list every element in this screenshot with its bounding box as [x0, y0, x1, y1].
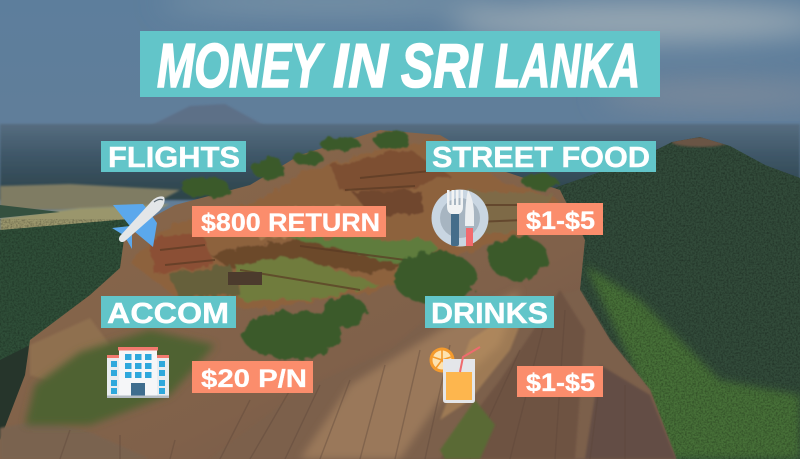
title banner: [140, 31, 660, 101]
title text: LANKA: [495, 32, 640, 101]
icon: airplane: [112, 196, 165, 249]
panel: accommodation: [101, 296, 313, 398]
price: $1-$5: [517, 366, 603, 397]
heading: street food: STREET FOOD: [432, 142, 650, 174]
icon: hotel building: [107, 347, 169, 398]
price: $1-$5: $1-$5: [526, 207, 595, 235]
price: $800 return: $800 RETURN: [201, 209, 380, 237]
price: $1-$5: [517, 203, 603, 235]
title text: IN: [333, 32, 389, 101]
panel: flights: [101, 141, 386, 249]
heading: flights: FLIGHTS: [108, 142, 240, 174]
heading: drinks: DRINKS: [431, 298, 548, 330]
rock striations: [210, 290, 676, 459]
panel: street food: [426, 141, 656, 246]
summit ruins: [130, 140, 560, 310]
panel: drinks: [425, 296, 603, 403]
title text: [157, 32, 640, 101]
heading: accom: ACCOM: [107, 298, 229, 330]
price: $20 p/n: [192, 361, 313, 393]
title text: MONEY: [157, 32, 325, 101]
price: $1-$5: $1-$5: [526, 369, 595, 397]
right forest hill: [520, 137, 800, 459]
trees on rock: [181, 130, 558, 359]
title text: SRI: [401, 32, 483, 101]
icon: plate with fork and knife: [432, 190, 488, 246]
price: $20 p/n: $20 P/N: [201, 365, 307, 393]
icon: juice glass with orange slice: [430, 347, 480, 403]
rock massif: [0, 130, 676, 459]
